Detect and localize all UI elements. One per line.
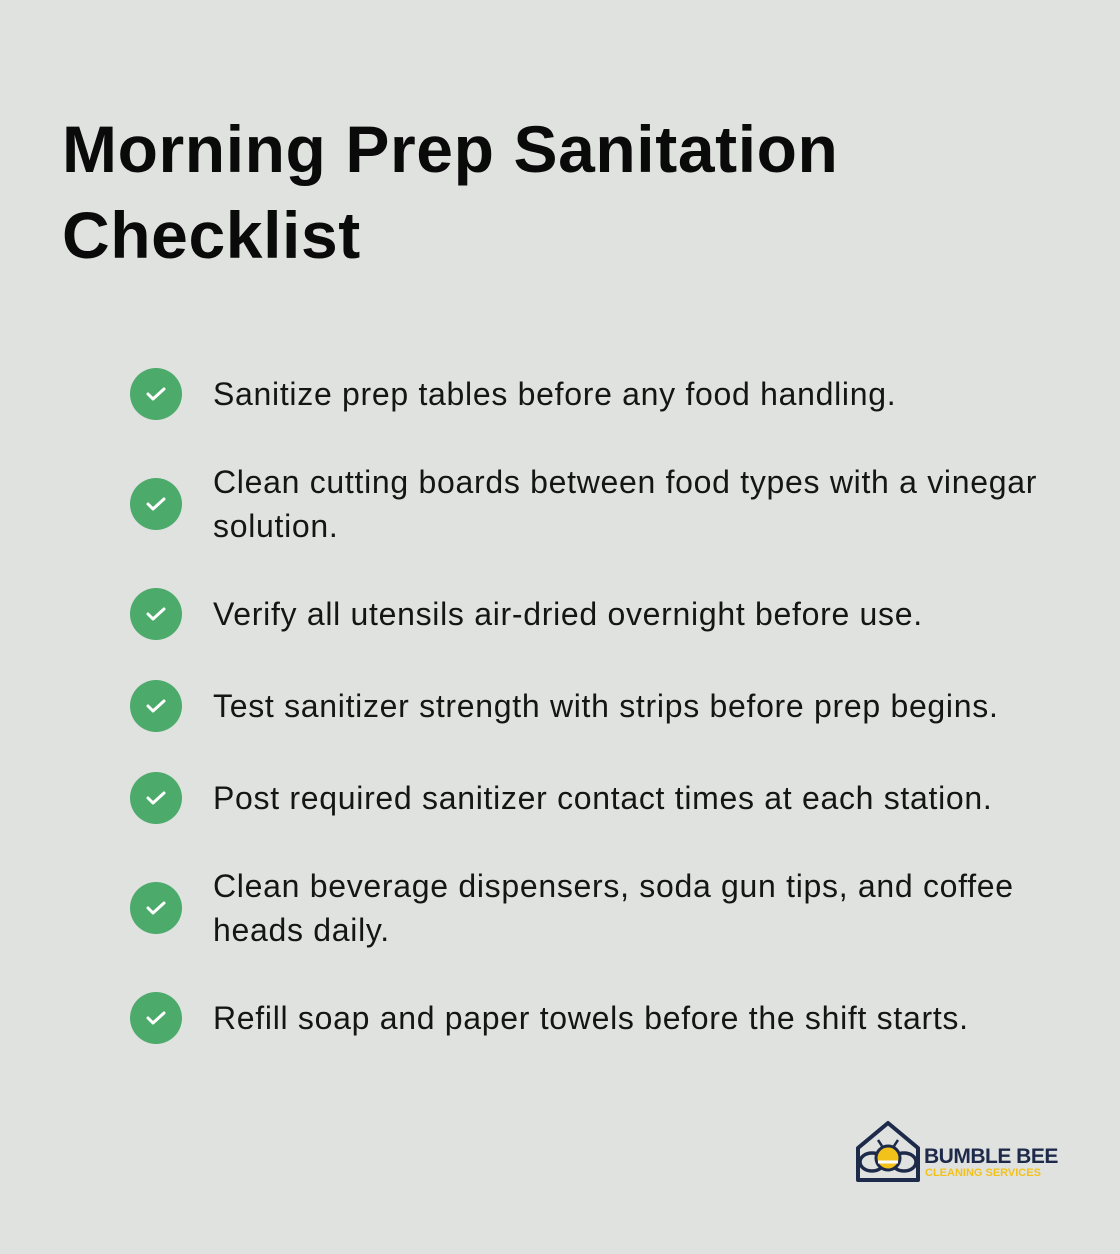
item 1: Sanitize prep tables before any food handling. — [213, 376, 896, 412]
item 5: Post required sanitizer contact times at each station. — [213, 780, 993, 816]
item 5 — [130, 772, 993, 824]
tagline: CLEANING SERVICES — [925, 1167, 1041, 1179]
item 4 — [130, 680, 999, 732]
item 3: Verify all utensils air-dried overnight before use. — [213, 596, 923, 632]
item 6: Clean beverage dispensers, soda gun tips, and coffee — [213, 868, 1014, 904]
item 7: Refill soap and paper towels before the shift starts. — [213, 1000, 969, 1036]
item 4: Test sanitizer strength with strips before prep begins. — [213, 688, 999, 724]
logo — [856, 1120, 1058, 1182]
item 2: solution. — [213, 508, 338, 544]
item 3 — [130, 588, 923, 640]
item 6: heads daily. — [213, 912, 390, 948]
icon: bee house — [856, 1120, 920, 1182]
title: Morning Prep Sanitation — [62, 112, 838, 186]
item 2 — [130, 464, 1037, 544]
brand name: BUMBLE BEE — [924, 1145, 1058, 1168]
item 7 — [130, 992, 969, 1044]
title — [62, 112, 838, 272]
item 2: Clean cutting boards between food types with a vinegar — [213, 464, 1037, 500]
item 1 — [130, 368, 896, 420]
item 6 — [130, 868, 1014, 948]
title: Checklist — [62, 198, 361, 272]
